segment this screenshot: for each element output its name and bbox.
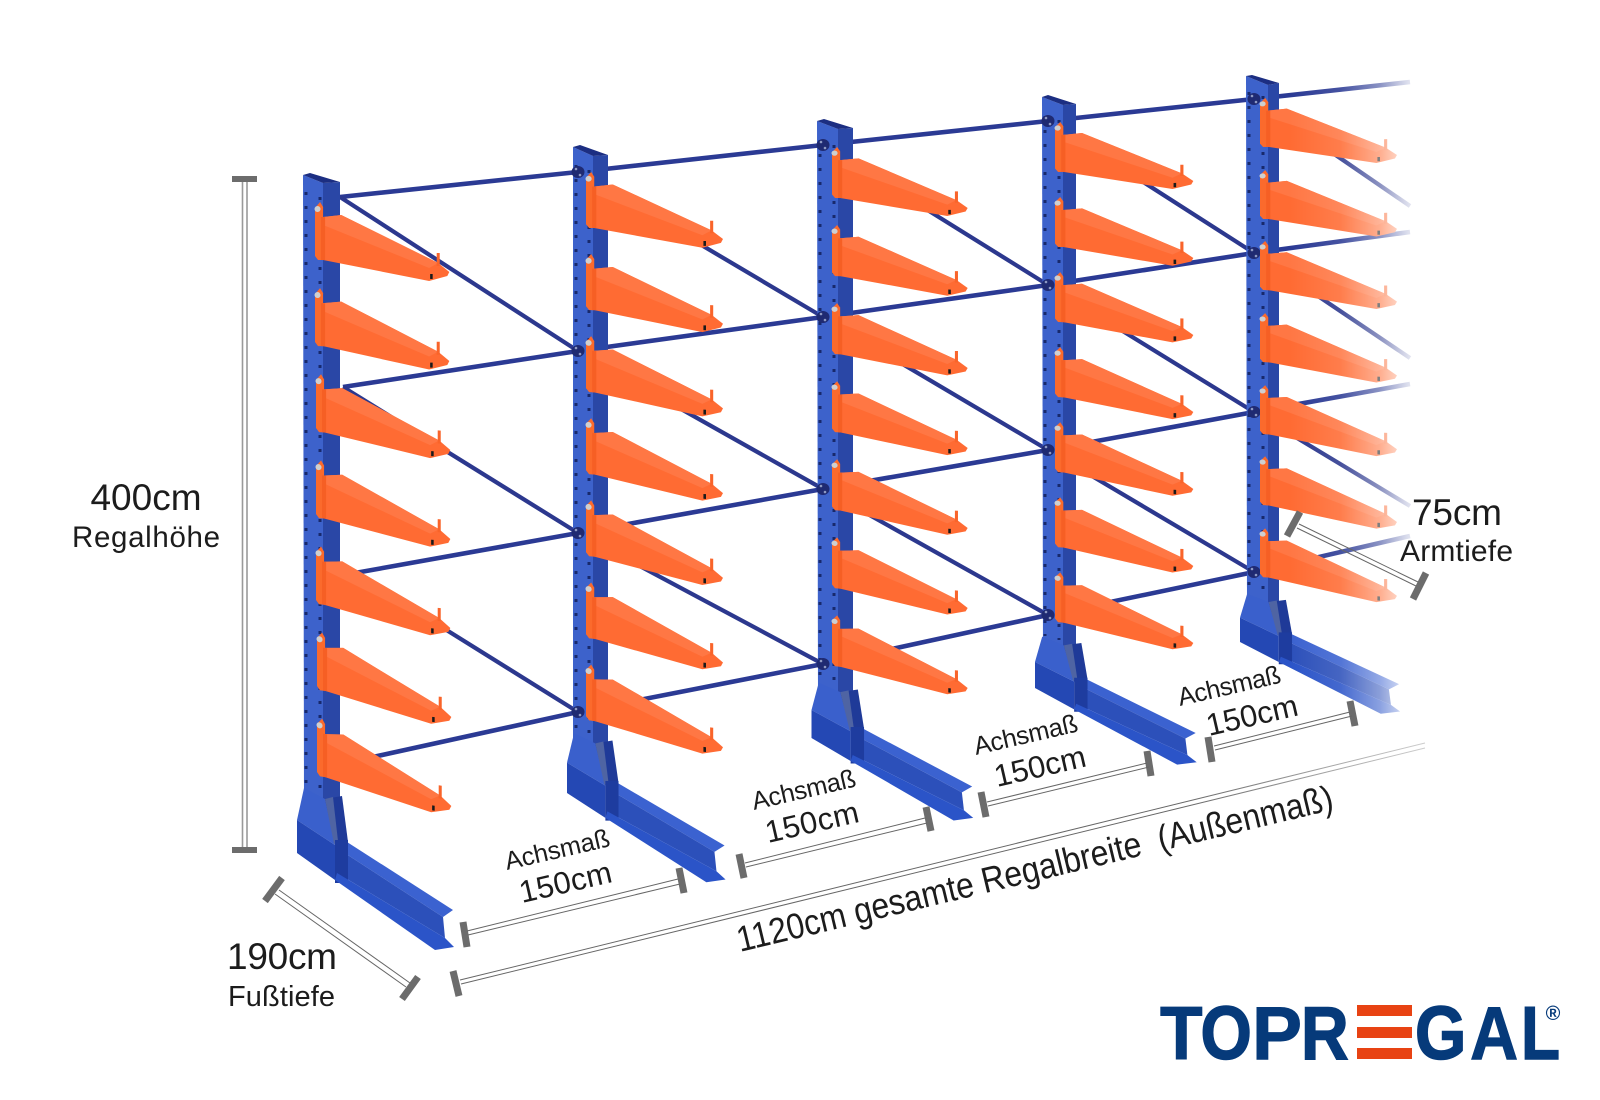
upright column 5 xyxy=(1246,75,1279,622)
connection plates on uprights xyxy=(572,93,1260,718)
arms of column 4 xyxy=(1054,121,1193,651)
dimension: foot depth 190cm xyxy=(265,878,418,999)
label: 400cm Regalhöhe: 400cm xyxy=(90,477,202,518)
label: 75cm Armtiefe xyxy=(1400,492,1513,568)
dimension: axis distance 2 xyxy=(739,807,931,878)
label: Achsmaß 150cm 2: Achsmaß xyxy=(749,765,859,816)
logo: TOPREGAL: R xyxy=(1301,991,1349,1075)
arms of column 3 xyxy=(831,146,968,696)
upright column 1 xyxy=(303,173,340,820)
label: 1120cm gesamte Regalbreite (Außenmaß): 1120cm gesamte Regalbreite (Außenmaß) xyxy=(732,777,1337,960)
label: Achsmaß 150cm 4: Achsmaß xyxy=(1175,661,1284,712)
logo: TOPREGAL: ® xyxy=(1546,1003,1561,1025)
logo: TOPREGAL: P xyxy=(1252,991,1302,1075)
foot column 4 xyxy=(1035,637,1197,765)
upright column 4 xyxy=(1042,95,1076,670)
foot column 1 xyxy=(297,788,454,950)
label: Achsmaß 150cm 1: 150cm xyxy=(516,855,615,910)
logo: TOPREGAL: O xyxy=(1200,991,1252,1075)
label: 400cm Regalhöhe xyxy=(72,477,220,554)
label: Achsmaß 150cm 3 xyxy=(971,710,1089,794)
logo: TOPREGAL: L xyxy=(1521,991,1560,1075)
logo: TOPREGAL: T xyxy=(1160,992,1203,1076)
logo: TOPREGAL: A xyxy=(1470,992,1518,1076)
rack structure: horizontal tie rods xyxy=(340,82,1410,757)
dimension: axis distance 4 xyxy=(1208,701,1355,762)
dimension: height 400cm xyxy=(232,179,257,850)
label: Achsmaß 150cm 4 xyxy=(1175,661,1301,743)
label: Achsmaß 150cm 2: 150cm xyxy=(762,794,862,850)
label: Achsmaß 150cm 2 xyxy=(749,765,862,850)
label: 190cm Fußtiefe xyxy=(227,936,337,1013)
label: 190cm Fußtiefe: 190cm xyxy=(227,936,337,977)
label: Achsmaß 150cm 1: Achsmaß xyxy=(502,824,613,876)
label: 75cm Armtiefe: Armtiefe xyxy=(1400,535,1513,568)
label: 400cm Regalhöhe: Regalhöhe xyxy=(72,521,220,554)
dimension: axis distance 3 xyxy=(981,751,1151,817)
label: Achsmaß 150cm 3: Achsmaß xyxy=(971,710,1081,761)
foot column 5 xyxy=(1240,594,1400,714)
dimension: arm depth 75cm xyxy=(1287,512,1426,599)
label: Achsmaß 150cm 1 xyxy=(502,824,615,910)
arms of column 5 xyxy=(1259,96,1397,603)
upright column 3 xyxy=(817,119,853,715)
rack structure: diagonal braces xyxy=(340,99,1410,712)
dimension: total width 1120cm xyxy=(453,743,1425,996)
label: 75cm Armtiefe: 75cm xyxy=(1412,492,1502,533)
right-side white fade of the rack xyxy=(1290,50,1430,730)
foot column 3 xyxy=(812,683,973,820)
dimension: axis distance 1 xyxy=(463,868,684,947)
upright column 2 xyxy=(573,145,608,765)
label: Achsmaß 150cm 4: 150cm xyxy=(1203,688,1301,743)
arms of column 1 xyxy=(314,202,451,815)
logo: TOPREGAL: G xyxy=(1415,991,1466,1075)
logo: TOPREGAL xyxy=(1160,991,1561,1076)
label: 190cm Fußtiefe: Fußtiefe xyxy=(228,981,335,1013)
foot column 2 xyxy=(567,733,726,882)
arms of column 2 xyxy=(585,171,723,756)
label: Achsmaß 150cm 3: 150cm xyxy=(991,739,1089,794)
